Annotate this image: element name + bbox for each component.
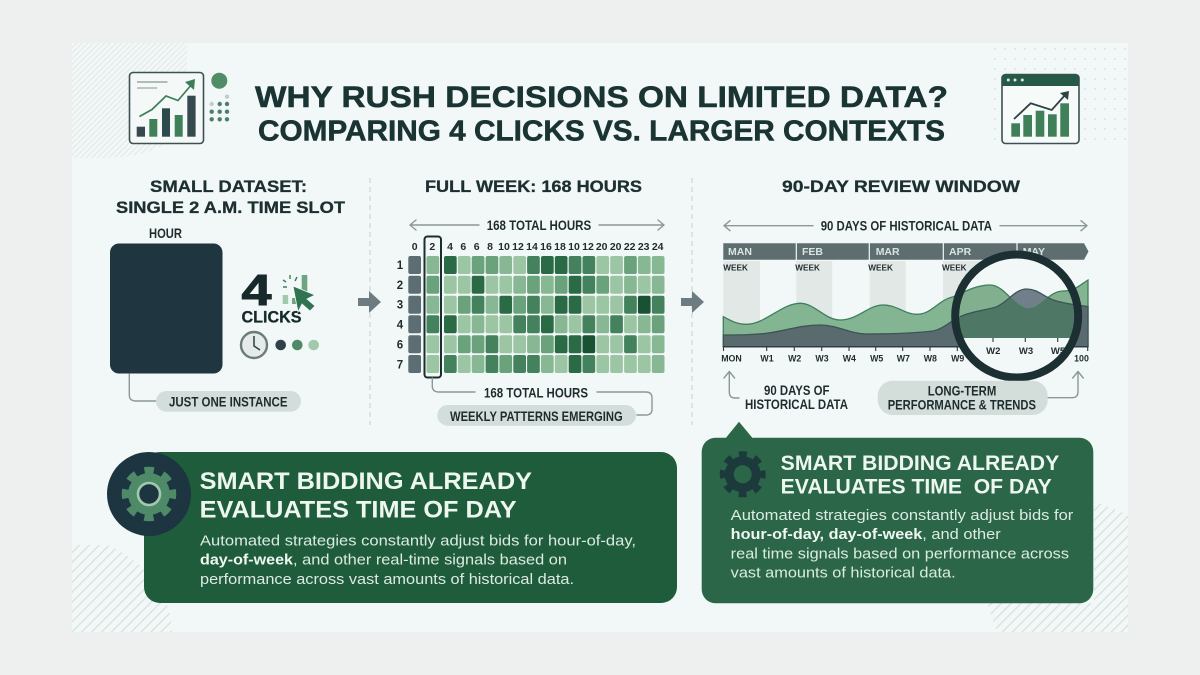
- week bands: WEEK: [795, 264, 820, 273]
- column labels: 20: [610, 241, 622, 253]
- decorative dots top-right: [990, 44, 1128, 144]
- panel: 90-day review: [721, 177, 1089, 415]
- title: COMPARING 4 CLICKS VS. LARGER CONTEXTS: [258, 116, 945, 148]
- month band: FEB: [802, 246, 823, 258]
- card body text: , and other: [922, 527, 1001, 543]
- card heading: EVALUATES TIME OF DAY: [781, 475, 1052, 498]
- column labels: 8: [487, 241, 493, 253]
- axis ticks and labels: [721, 346, 1089, 364]
- decorative hatch bottom-right: [987, 501, 1128, 632]
- column labels: 20: [596, 241, 608, 253]
- card body text: Automated strategies constantly adjust bids for: [731, 508, 1073, 524]
- note: 90 days of historical data: 90 DAYS OF: [764, 382, 830, 398]
- axis ticks and labels: W4: [843, 354, 856, 364]
- column labels: 10: [498, 241, 510, 253]
- magnifier lens: W5: [1051, 346, 1066, 357]
- decorative hatch bottom-left: [72, 545, 172, 632]
- column labels: 24: [652, 241, 664, 253]
- span label: 90 days: 90 DAYS OF HISTORICAL DATA: [821, 218, 992, 234]
- connector: [129, 374, 157, 401]
- dark hour block: [110, 244, 222, 374]
- column labels: 2: [429, 241, 435, 253]
- icon: click cursor: [283, 275, 315, 312]
- bottom label: 168 total hours: [432, 378, 652, 415]
- column labels: 10: [568, 241, 580, 253]
- axis ticks and labels: W3: [815, 354, 829, 364]
- card body text: hour-of-day, day-of-week: [731, 527, 923, 543]
- span label: 168 total hours: [410, 217, 664, 233]
- row labels: 4: [397, 320, 404, 332]
- column labels: 16: [540, 241, 552, 253]
- axis ticks and labels: W9: [951, 354, 964, 364]
- callout: weekly patterns: [437, 405, 636, 426]
- week bands: WEEK: [723, 264, 748, 273]
- divider right: [691, 178, 693, 425]
- heading: small dataset: SMALL DATASET:: [150, 177, 307, 196]
- column labels: 18: [554, 241, 566, 253]
- hour label: HOUR: [149, 225, 182, 241]
- column labels: 6: [474, 241, 480, 253]
- clicks count: [242, 266, 302, 326]
- icon: analytics chart left: [130, 72, 204, 144]
- arrow: week to review: [681, 291, 704, 313]
- icon: clock and dots: [241, 332, 319, 358]
- row labels: 6: [397, 340, 403, 352]
- card with pointer: [702, 422, 1093, 603]
- area chart: [723, 280, 1088, 347]
- row labels: 1: [397, 260, 404, 272]
- panel: smart bidding left: [107, 452, 677, 603]
- column labels: 4: [447, 241, 453, 253]
- panel: small dataset: [110, 177, 346, 412]
- column labels: 12: [582, 241, 594, 253]
- axis ticks and labels: W1: [760, 354, 774, 364]
- column labels: 23: [638, 241, 650, 253]
- note: 90 days of historical data: HISTORICAL DATA: [745, 396, 848, 412]
- card body text: performance across vast amounts of historical data.: [200, 572, 574, 588]
- magnifier lens: W2: [986, 346, 1000, 357]
- icon: gear: [723, 454, 763, 494]
- axis ticks and labels: W2: [788, 354, 801, 364]
- heading: small dataset: SINGLE 2 A.M. TIME SLOT: [116, 198, 346, 217]
- panel: full week: [397, 177, 664, 426]
- card body text: [200, 534, 636, 588]
- week bands: WEEK: [868, 264, 893, 273]
- card body text: , and other real-time signals based on: [293, 553, 567, 569]
- card heading: SMART BIDDING ALREADY: [200, 468, 532, 495]
- title: [255, 81, 948, 148]
- axis ticks and labels: MON: [721, 354, 742, 364]
- axis ticks and labels: W7: [897, 354, 910, 364]
- callout: just one instance: JUST ONE INSTANCE: [169, 394, 288, 410]
- month band: MAN: [728, 246, 752, 258]
- card heading: [200, 468, 532, 523]
- heading: full week: FULL WEEK: 168 HOURS: [425, 177, 642, 196]
- heading: 90-day review: 90-DAY REVIEW WINDOW: [782, 177, 1021, 196]
- card body text: vast amounts of historical data.: [731, 565, 956, 581]
- icon: browser chart right: [1002, 74, 1079, 144]
- axis ticks and labels: 100: [1074, 354, 1089, 364]
- row labels: 7: [397, 360, 403, 372]
- title: WHY RUSH DECISIONS ON LIMITED DATA?: [255, 81, 948, 114]
- row labels: [397, 260, 404, 372]
- month band: APR: [949, 246, 972, 258]
- card heading: EVALUATES TIME OF DAY: [200, 496, 517, 523]
- card background: [144, 452, 677, 603]
- card body text: real time signals based on performance across: [731, 546, 1069, 562]
- note: 90 days of historical data: [724, 372, 848, 412]
- bottom label: 168 total hours: 168 TOTAL HOURS: [484, 384, 588, 400]
- inner background panel: [72, 43, 1128, 632]
- axis ticks and labels: W5: [870, 354, 883, 364]
- magnifier lens: [951, 250, 1082, 381]
- magnifier lens: W3: [1019, 346, 1033, 357]
- column labels: 0: [412, 241, 418, 253]
- clicks count: CLICKS: [242, 308, 302, 326]
- callout: long-term performance: LONG-TERM: [928, 383, 996, 399]
- card body text: [731, 508, 1073, 581]
- arrow: small to week: [358, 291, 381, 313]
- span label: 168 total hours: 168 TOTAL HOURS: [487, 217, 591, 233]
- divider left: [369, 178, 371, 425]
- month band: MAY: [1023, 246, 1045, 258]
- callout: long-term performance: PERFORMANCE & TRENDS: [888, 396, 1036, 412]
- card heading: [781, 452, 1059, 498]
- heading: small dataset: [116, 177, 346, 217]
- heatmap: [408, 256, 664, 373]
- column labels: 6: [460, 241, 466, 253]
- week bands: WEEK: [942, 264, 967, 273]
- axis ticks and labels: W8: [924, 354, 937, 364]
- month band: MAR: [876, 246, 900, 258]
- panel: smart bidding right: [702, 422, 1093, 603]
- highlighted 2 a.m. column: [424, 236, 441, 378]
- decorative hatch top-left: [72, 43, 187, 158]
- card body text: day-of-week: [200, 553, 294, 569]
- callout: weekly patterns: WEEKLY PATTERNS EMERGING: [450, 408, 623, 424]
- callout: long-term performance: [878, 372, 1083, 415]
- week bands: [723, 261, 979, 333]
- callout: just one instance: [156, 391, 301, 412]
- span label: 90 days: [724, 218, 1087, 234]
- column labels: 14: [526, 241, 538, 253]
- column labels: 12: [512, 241, 524, 253]
- card heading: SMART BIDDING ALREADY: [781, 452, 1059, 475]
- month band: [723, 243, 1088, 260]
- row labels: 2: [397, 280, 403, 292]
- card body text: Automated strategies constantly adjust bids for hour-of-day,: [200, 534, 636, 550]
- column labels: 22: [624, 241, 636, 253]
- clicks count: 4: [242, 266, 272, 315]
- column labels: [412, 241, 664, 253]
- icon: gear badge: [107, 452, 191, 536]
- icon: green dot cluster: [210, 73, 229, 122]
- row labels: 3: [397, 300, 403, 312]
